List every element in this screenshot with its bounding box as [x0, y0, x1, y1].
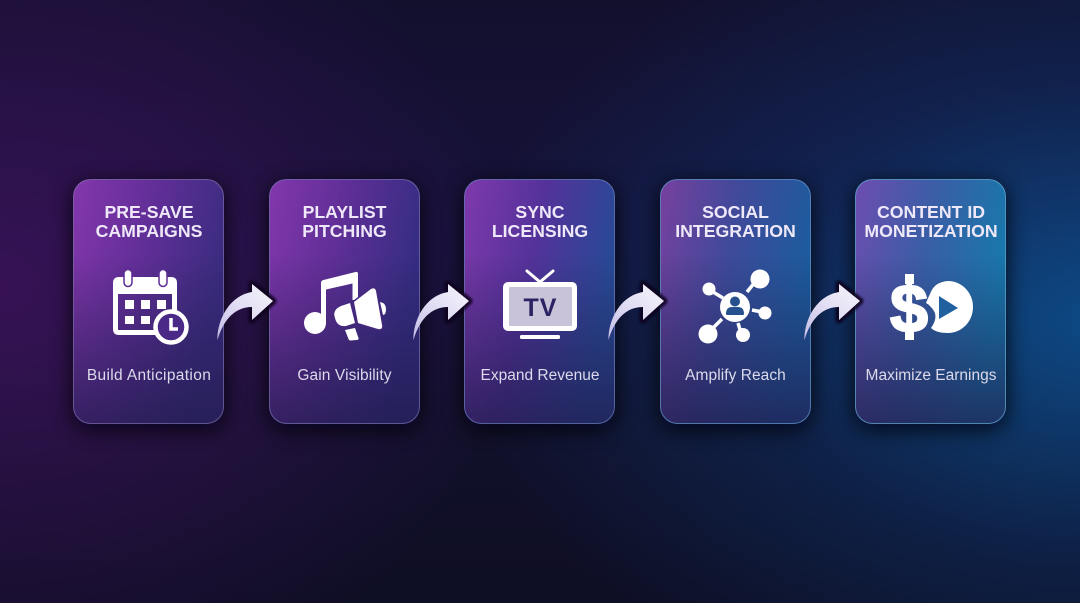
caption: Build Anticipation: [87, 367, 211, 384]
card 2: playlist pitching: [269, 180, 420, 429]
heading: CONTENT ID: [877, 202, 985, 222]
icon: music note and megaphone: [304, 272, 386, 340]
heading: SYNC: [515, 202, 565, 222]
heading: CAMPAIGNS: [96, 221, 203, 241]
icon: social network: [698, 270, 772, 344]
icon: dollar and play: [890, 271, 973, 347]
icon: television: [503, 271, 577, 339]
card 3: sync licensing: [464, 180, 615, 429]
caption: Amplify Reach: [685, 367, 786, 384]
icon: dollar and play: $: [890, 271, 928, 347]
heading: PITCHING: [302, 221, 387, 241]
heading: PRE-SAVE: [104, 202, 194, 222]
caption: Expand Revenue: [481, 367, 599, 384]
icon: calendar with clock: [113, 270, 186, 342]
caption: Maximize Earnings: [866, 367, 997, 384]
heading: MONETIZATION: [864, 221, 998, 241]
arrow 3: [608, 284, 664, 340]
card 4: social integration: [660, 180, 811, 429]
arrow 4: [804, 284, 860, 340]
heading: LICENSING: [492, 221, 588, 241]
arrow 1: [217, 284, 273, 340]
icon: television: TV: [524, 294, 557, 322]
card 5: content id monetization: [855, 180, 1006, 429]
arrow 2: [413, 284, 469, 340]
heading: SOCIAL: [702, 202, 769, 222]
caption: Gain Visibility: [297, 367, 392, 384]
card 1: pre-save campaigns: [73, 180, 224, 429]
heading: PLAYLIST: [303, 202, 387, 222]
heading: INTEGRATION: [675, 221, 796, 241]
